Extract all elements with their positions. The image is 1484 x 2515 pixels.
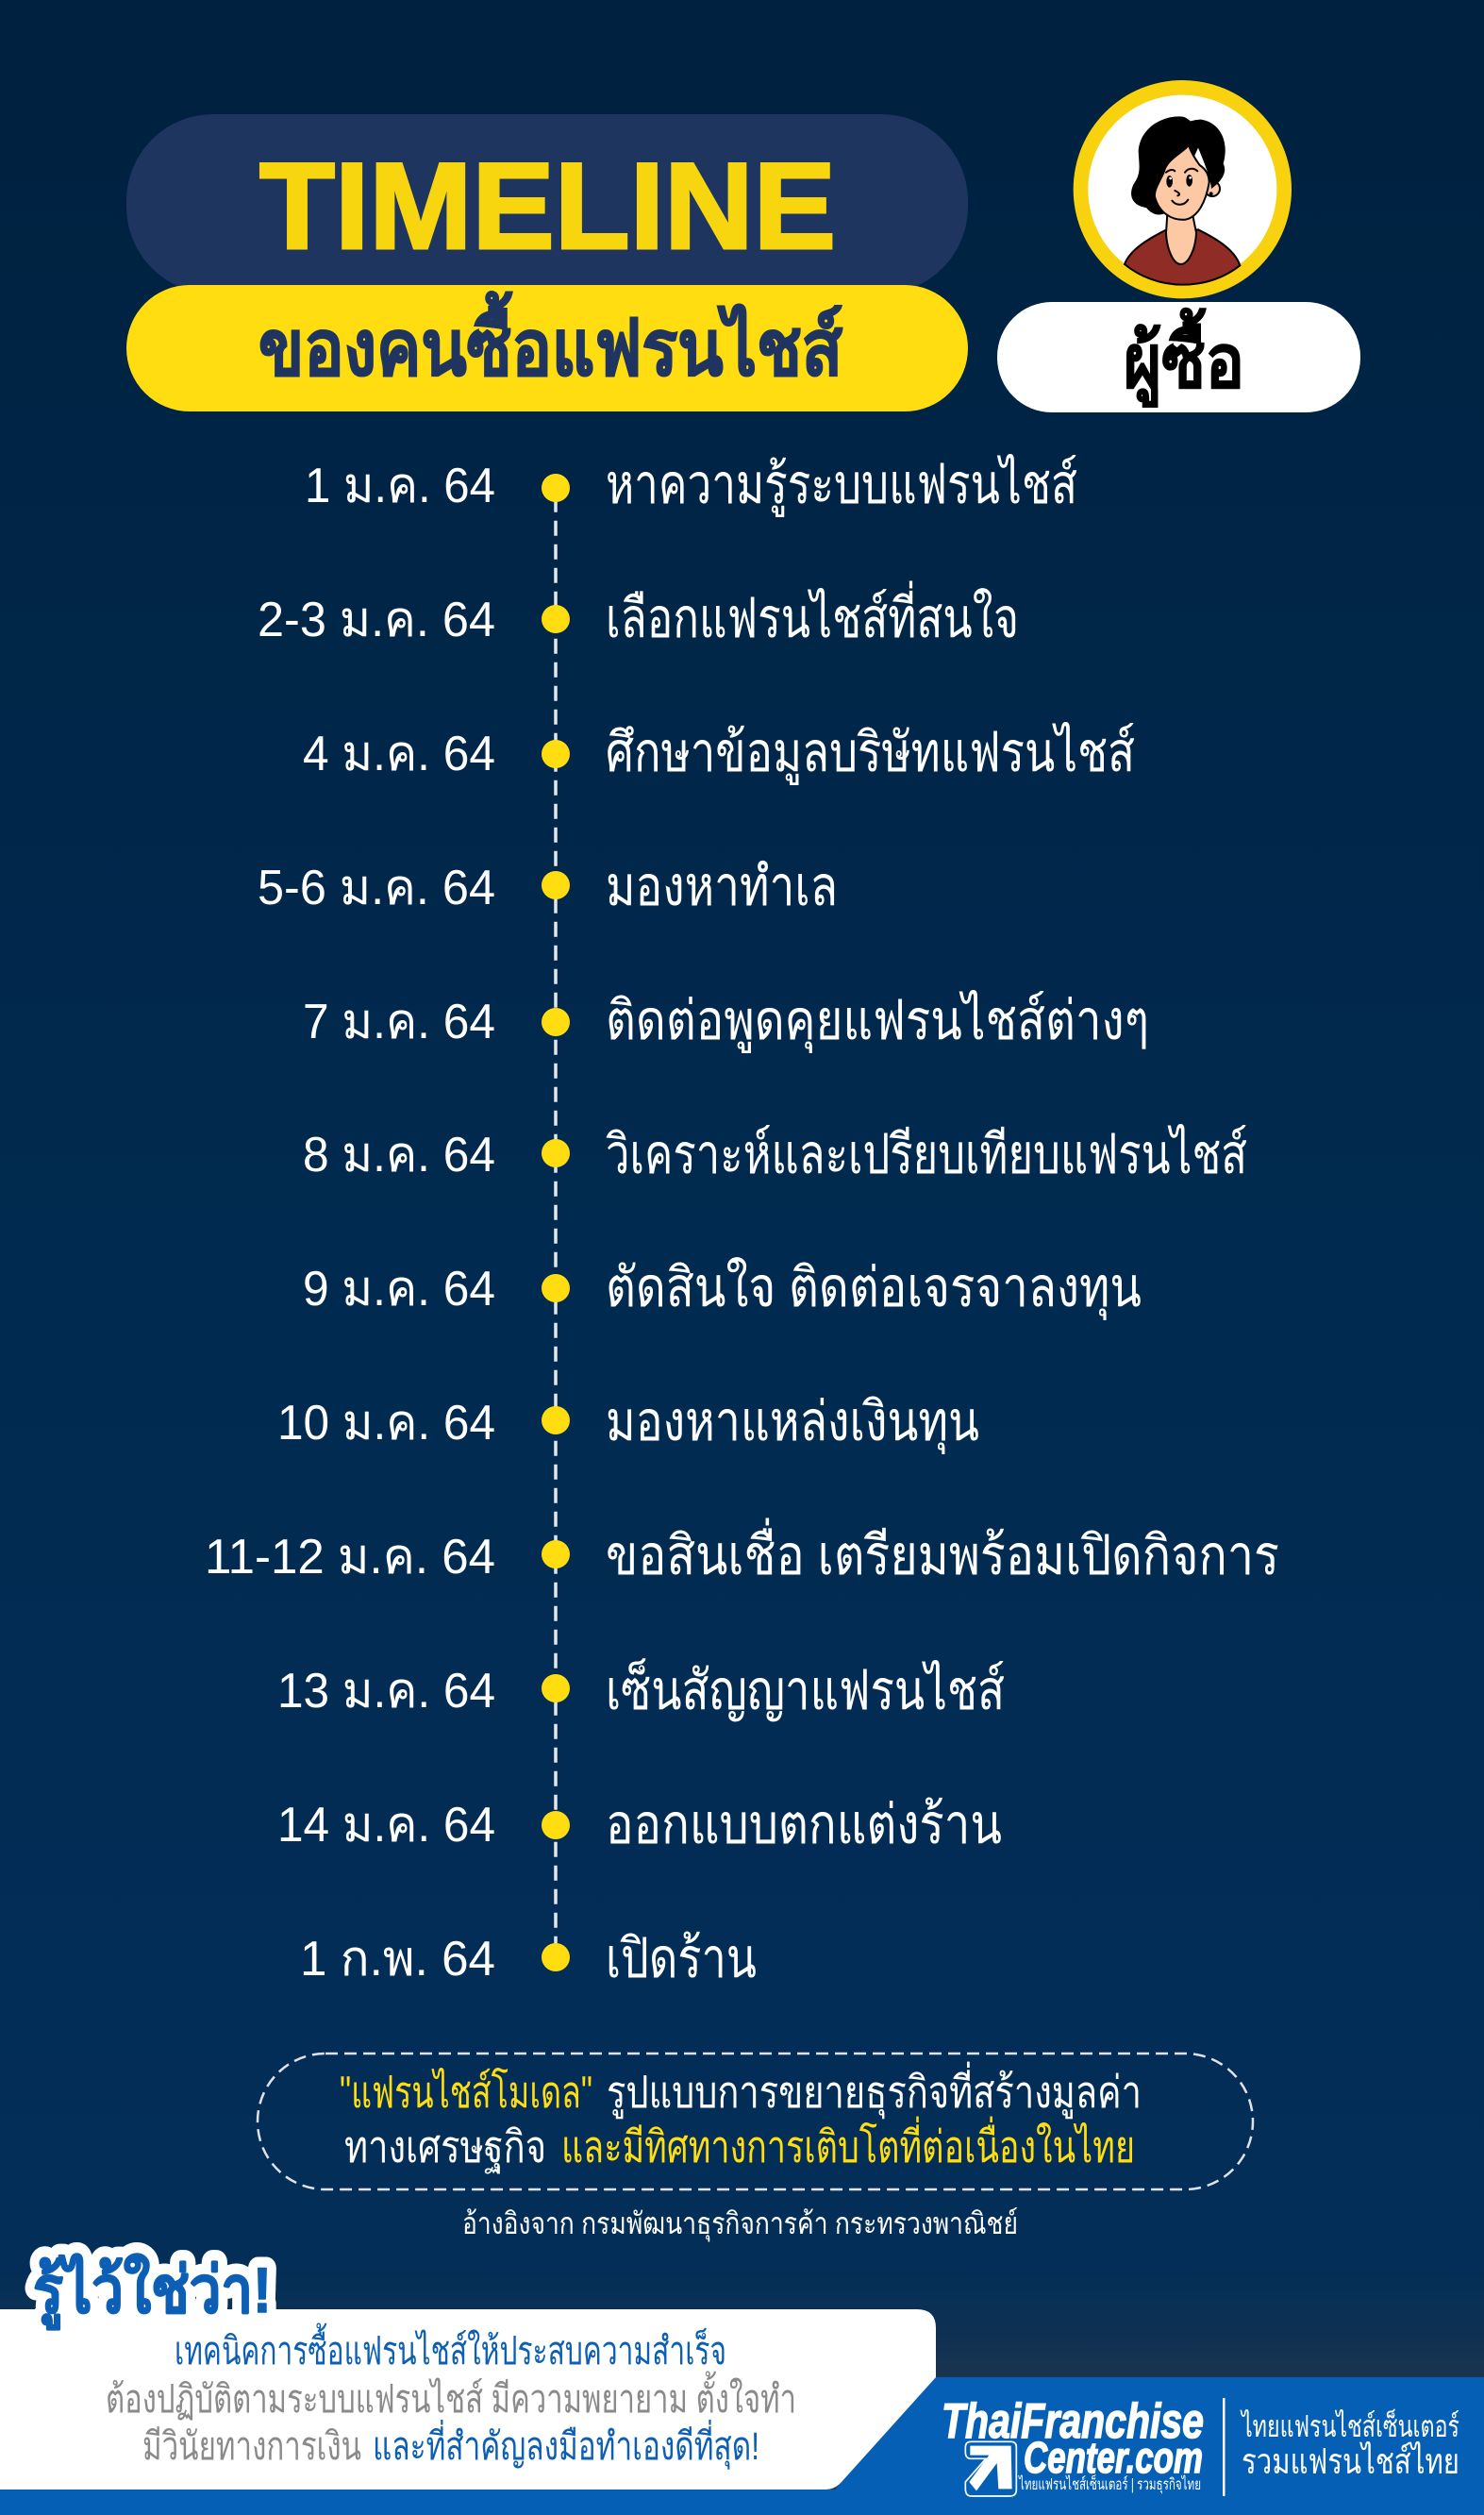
blue footer band — [0, 2377, 1484, 2515]
timeline row 1: 1 ม.ค. 64 — [305, 459, 495, 513]
timeline row 3: 4 ม.ค. 64 — [303, 727, 495, 781]
timeline row 3: ศึกษาข้อมูลบริษัทแฟรนไชส์ — [606, 721, 1135, 785]
tip text lines: มีวินัยทางการเงิน — [142, 2424, 361, 2468]
callout: franchise model: และมีทิศทางการเติบโตที่ต่อเนื่องในไทย — [561, 2116, 1135, 2171]
timeline row 10: เซ็นสัญญาแฟรนไชส์ — [606, 1658, 1005, 1721]
callout: franchise model: รูปแบบการขยายธุรกิจที่สร้างมูลค่า — [607, 2061, 1142, 2120]
timeline row 12: เปิดร้าน — [606, 1928, 757, 1989]
timeline row 5: 7 ม.ค. 64 — [303, 995, 495, 1049]
timeline row 5 — [303, 989, 1149, 1054]
logo divider — [1223, 2398, 1225, 2496]
logo wordmark: ThaiFranchise — [942, 2394, 1204, 2449]
timeline row 1: หาความรู้ระบบแฟรนไชส์ — [606, 453, 1077, 517]
timeline row 6: 8 ม.ค. 64 — [303, 1128, 495, 1182]
timeline row 8 — [277, 1391, 979, 1455]
buyer label pill — [997, 302, 1360, 412]
tip heading: รู้ไว้ใช่ว่า! — [33, 2253, 272, 2331]
logo: ThaiFranchise Center — [942, 2394, 1204, 2496]
buyer label pill: ผู้ซื้อ — [1124, 308, 1244, 408]
timeline row 6 — [303, 1123, 1247, 1185]
logo tagline: ไทยแฟรนไชส์เซ็นเตอร์ | รวมธุรกิจไทย — [1018, 2473, 1201, 2494]
tip text lines: เทคนิคการซื้อแฟรนไชส์ให้ประสบความสำเร็จ — [175, 2322, 726, 2372]
source note: อ้างอิงจาก กรมพัฒนาธุรกิจการค้า กระทรวงพาณิชย์ — [462, 2206, 1018, 2242]
timeline row 9: 11-12 ม.ค. 64 — [205, 1530, 495, 1584]
timeline row 2: 2-3 ม.ค. 64 — [258, 593, 495, 647]
timeline row 2: เลือกแฟรนไชส์ที่สนใจ — [606, 580, 1019, 649]
timeline row 7: ตัดสินใจ ติดต่อเจรจาลงทุน — [606, 1256, 1142, 1321]
tip text lines — [106, 2322, 796, 2470]
timeline row 11: 14 ม.ค. 64 — [277, 1798, 495, 1853]
timeline row 4 — [258, 856, 838, 917]
logo wordmark — [942, 2394, 1204, 2482]
timeline row 8: 10 ม.ค. 64 — [277, 1396, 495, 1450]
timeline row 1 — [305, 453, 1077, 517]
icon: logo arrow — [965, 2441, 1016, 2496]
callout: franchise model: ทางเศรษฐกิจ — [344, 2121, 546, 2173]
timeline row 8: มองหาแหล่งเงินทุน — [606, 1391, 979, 1455]
timeline row 5: ติดต่อพูดคุยแฟรนไชส์ต่างๆ — [606, 989, 1149, 1054]
title panel: TIMELINE — [126, 114, 968, 293]
timeline row 10: 13 ม.ค. 64 — [277, 1664, 495, 1719]
timeline row 9: ขอสินเชื่อ เตรียมพร้อมเปิดกิจการ — [606, 1517, 1279, 1586]
timeline row 12: 1 ก.พ. 64 — [300, 1932, 495, 1987]
callout: franchise model: "แฟรนไชส์โมเดล" — [340, 2067, 592, 2117]
subtitle panel: buyer timeline: ของคนซื้อแฟรนไชส์ — [258, 291, 842, 392]
tip heading: รู้ไว้ใช่ว่า! — [33, 2253, 272, 2331]
tip text lines: และที่สำคัญลงมือทำเองดีที่สุด! — [373, 2420, 759, 2470]
timeline row 10 — [277, 1658, 1005, 1721]
timeline row 9 — [205, 1517, 1279, 1586]
timeline row 2 — [258, 580, 1019, 649]
tip panel — [0, 2309, 936, 2490]
timeline row 6: วิเคราะห์และเปรียบเทียบแฟรนไชส์ — [606, 1123, 1247, 1185]
icon: buyer avatar — [1074, 80, 1292, 298]
timeline row 11 — [277, 1794, 1002, 1855]
timeline row 7 — [303, 1256, 1142, 1321]
timeline row 11: ออกแบบตกแต่งร้าน — [606, 1794, 1002, 1855]
timeline row 7: 9 ม.ค. 64 — [303, 1262, 495, 1316]
logo slogan — [1240, 2408, 1459, 2482]
subtitle panel: buyer timeline — [126, 285, 968, 411]
tip text lines: ต้องปฏิบัติตามระบบแฟรนไชส์ มีความพยายาม ตั้งใจทำ — [106, 2371, 796, 2421]
timeline row 4: 5-6 ม.ค. 64 — [258, 861, 495, 915]
callout: franchise model — [258, 2054, 1253, 2189]
timeline row 3 — [303, 721, 1135, 785]
title panel: TIMELINE: TIMELINE — [259, 137, 836, 275]
timeline row 12 — [300, 1928, 757, 1989]
timeline — [205, 453, 1279, 1989]
timeline row 4: มองหาทำเล — [606, 856, 838, 917]
logo wordmark: Center.com — [1024, 2433, 1203, 2482]
